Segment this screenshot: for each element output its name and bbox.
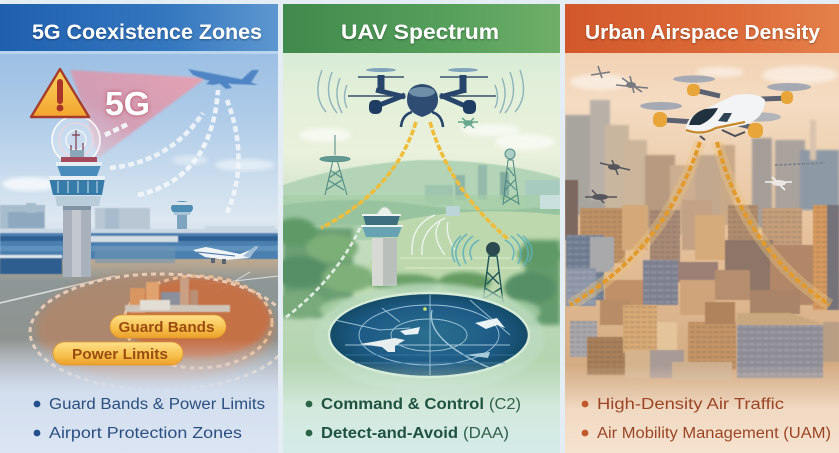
illustration: control tower	[361, 207, 403, 286]
illustration: airport ground	[0, 258, 278, 390]
heading: Urban Airspace Density: Urban Airspace Density	[585, 22, 821, 44]
icon: radio tower with signal waves	[452, 234, 532, 302]
panel: 5G coexistence zones	[0, 4, 290, 453]
heading: UAV Spectrum: UAV Spectrum	[341, 21, 499, 44]
bottom fade	[0, 340, 278, 453]
arrow: pale dashed link	[285, 228, 360, 318]
arrow: orange flight corridors	[570, 142, 830, 305]
label: Guard Bands pill: Guard Bands	[118, 320, 214, 336]
heading: 5G Coexistence Zones: 5G Coexistence Zones	[32, 21, 262, 44]
panel: UAV spectrum	[272, 4, 562, 453]
illustration: runway lines	[0, 272, 278, 303]
illustration: small control tower	[171, 201, 193, 229]
illustration: 5G signal beam	[70, 70, 206, 158]
illustration: small drone	[458, 118, 478, 128]
illustration: mid-ground buildings	[565, 180, 839, 325]
illustration: hazy far skyline	[565, 100, 839, 235]
panel: urban airspace density	[565, 4, 839, 453]
illustration: foreground buildings	[570, 302, 839, 380]
bullet list: urban airspace: Air Mobility Management (UAM)	[597, 425, 831, 442]
bullet list: UAV functions	[306, 396, 521, 442]
bullet list: UAV functions: (C2)	[489, 396, 521, 413]
icon: warning triangle	[31, 69, 89, 117]
illustration: forest	[272, 218, 562, 325]
arrow: yellow command links	[321, 122, 508, 239]
bullet list: 5G zones: Airport Protection Zones	[49, 425, 242, 442]
illustration: radar display	[316, 280, 542, 380]
illustration: distant skyline	[0, 203, 150, 230]
illustration: air taxi	[640, 75, 811, 140]
bullet list: urban airspace	[582, 396, 831, 442]
icon: main UAV with signal arcs	[318, 68, 524, 127]
text: 5G label: 5G	[105, 85, 150, 122]
label: Power Limits pill: Power Limits	[72, 347, 168, 363]
icon: right lattice tower	[503, 149, 519, 205]
heading: UAV Spectrum	[283, 4, 560, 53]
illustration: city inside the zone	[125, 278, 230, 313]
bullet list: UAV functions: Command & Control	[321, 396, 484, 413]
illustration: green fields and roads	[356, 195, 560, 296]
illustration: small drones	[585, 66, 825, 203]
label: Guard Bands pill	[110, 315, 226, 338]
bullet list: UAV functions: (DAA)	[463, 425, 509, 442]
illustration: main control tower	[49, 116, 105, 277]
bottom fade	[283, 360, 560, 453]
illustration: hills and distant city	[283, 160, 560, 240]
label: Power Limits pill	[53, 342, 183, 365]
heading: 5G Coexistence Zones	[0, 4, 278, 54]
illustration: terminal building	[0, 226, 278, 274]
illustration: clouds	[570, 66, 838, 90]
bullet list: UAV functions: Detect-and-Avoid	[321, 425, 458, 442]
illustration: orange protection zone	[30, 273, 290, 390]
illustration: airplane in flight	[188, 69, 259, 89]
arrow: dashed signal paths	[105, 90, 238, 213]
icon: left lattice tower	[320, 135, 350, 195]
bullet list: urban airspace: High-Density Air Traffic	[597, 396, 784, 413]
bullet list: 5G zones	[34, 396, 265, 442]
heading: Urban Airspace Density	[565, 4, 839, 53]
illustration: parked aircraft	[193, 246, 258, 264]
bottom fade	[565, 365, 839, 453]
bullet list: 5G zones: Guard Bands & Power Limits	[49, 396, 265, 413]
illustration: clouds	[299, 124, 555, 150]
